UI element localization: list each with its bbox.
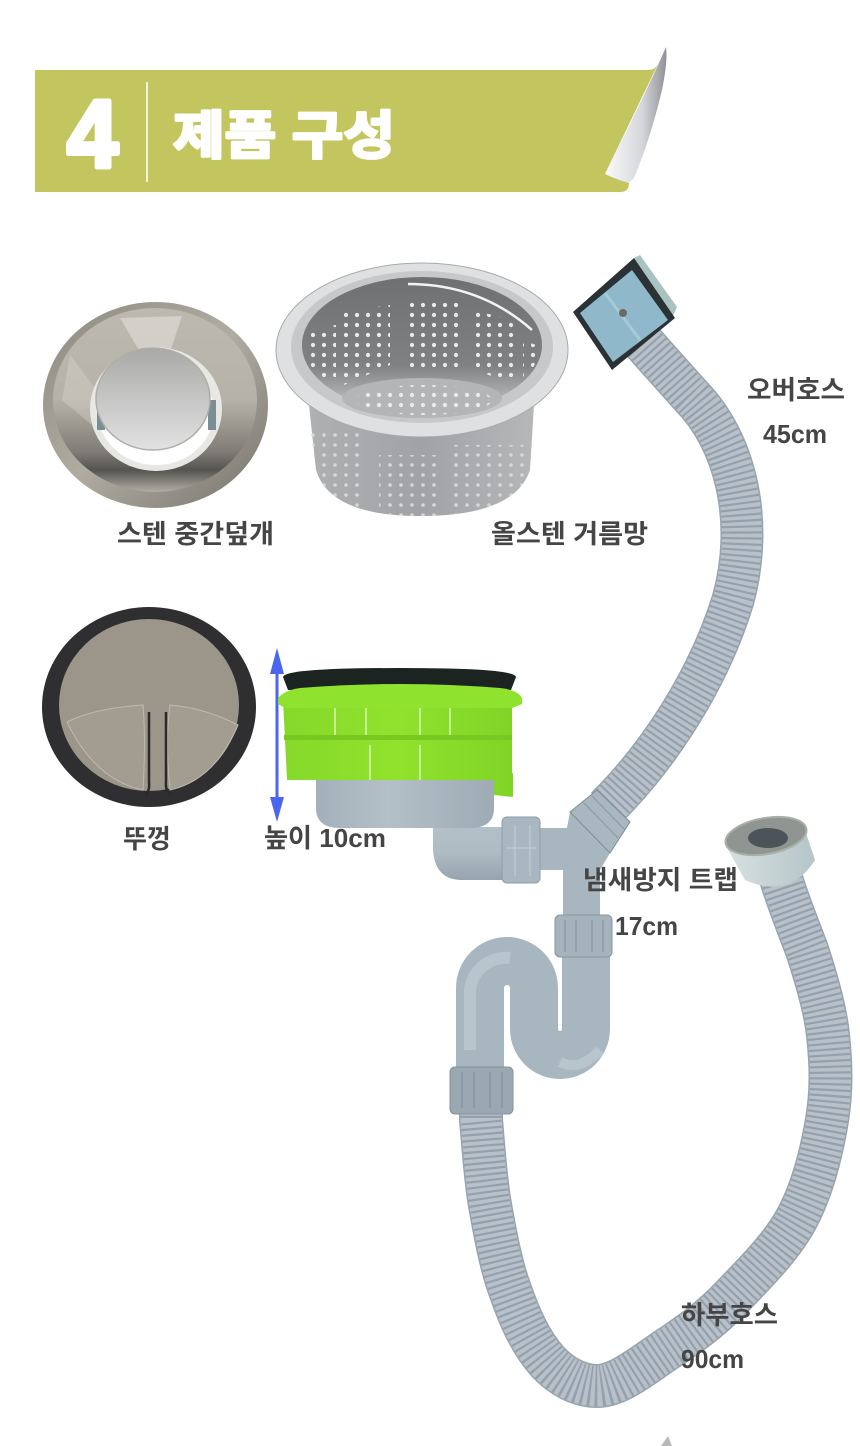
rubber gasket [283, 668, 516, 690]
nut: upper [555, 915, 612, 957]
next banner curl tip [661, 1436, 672, 1446]
divider [146, 82, 148, 182]
S-trap [450, 915, 612, 1114]
length: 45cm [763, 419, 827, 449]
icon: page curl [605, 47, 666, 183]
banner ribbon [35, 64, 658, 192]
nut: lower [450, 1067, 513, 1114]
green strainer body [278, 668, 522, 828]
label: trap: 냄새방지 트랩 [583, 865, 738, 895]
section number: 4 [67, 81, 118, 188]
stainless strainer basket [276, 263, 568, 520]
label: height: 높이 10cm [264, 823, 386, 853]
label: over hose: 오버호스 [747, 375, 845, 405]
nut: branch [570, 790, 630, 853]
smoked lid [42, 607, 256, 807]
green housing [283, 700, 513, 797]
label: lower hose [681, 1300, 778, 1374]
trap elbow and T-piece [433, 790, 630, 915]
hose head [573, 255, 677, 370]
lower hose [481, 811, 830, 1386]
steel mid cover [43, 302, 268, 508]
label: over hose [747, 375, 845, 449]
over hose [573, 255, 742, 808]
label: lid: 뚜껑 [123, 824, 171, 854]
hose cuff [722, 811, 815, 887]
label: stainless strainer: 올스텐 거름망 [491, 519, 648, 549]
heading: 제품 구성 [173, 108, 395, 166]
label: lower hose: 하부호스 [681, 1300, 778, 1330]
length: 90cm [681, 1344, 744, 1374]
title banner [35, 47, 666, 192]
label: steel mid cover: 스텐 중간덮개 [117, 519, 274, 549]
arrow: height dimension [270, 648, 284, 822]
nut: horizontal [502, 817, 540, 883]
label: trap [583, 865, 738, 941]
length: 17cm [615, 911, 678, 941]
drain bowl [316, 778, 494, 828]
